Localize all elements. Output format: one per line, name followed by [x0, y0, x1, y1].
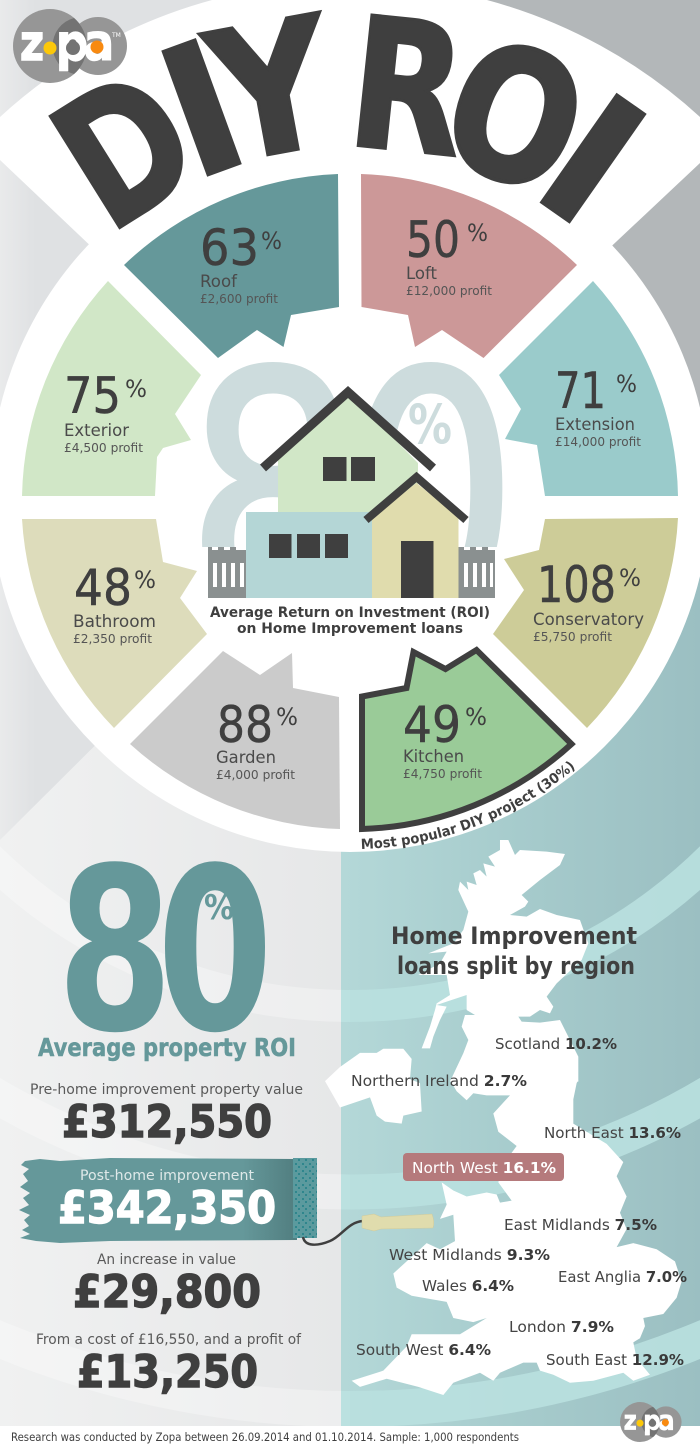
segment: extension: % — [616, 370, 637, 398]
central faded 80%: % — [408, 393, 452, 456]
segment: exterior — [22, 281, 201, 496]
logo: zopa bottom: a — [658, 1406, 675, 1437]
region labels: West Midlands 9.3% — [389, 1246, 550, 1264]
segment: loft: Loft — [406, 264, 437, 284]
segment: exterior: Exterior — [64, 421, 129, 441]
roller handle — [362, 1214, 434, 1231]
segment: kitchen, highlighted: Kitchen — [403, 747, 464, 767]
central faded 80% — [202, 362, 502, 547]
caption: average ROI: Average Return on Investment (ROI) — [210, 605, 490, 621]
segment: garden: % — [276, 703, 298, 731]
logo: zopa bottom: p — [643, 1406, 661, 1437]
upper windows — [323, 457, 375, 481]
fence: right — [458, 547, 495, 598]
big 80%: % — [204, 888, 234, 928]
heading: loans by region: Home Improvement — [391, 922, 637, 950]
big 80%: 8 — [57, 820, 173, 1083]
segment: exterior: % — [125, 375, 147, 403]
stat: pre-improvement value: Pre-home improvement property value — [30, 1082, 303, 1098]
region labels: London 7.9% — [509, 1318, 614, 1336]
region labels: South West 6.4% — [356, 1341, 491, 1359]
logo: zopa top: a — [84, 14, 114, 72]
segment: loft: % — [467, 219, 488, 247]
logo: zopa bottom: z — [624, 1406, 637, 1437]
roller cable — [303, 1221, 363, 1245]
roller head — [293, 1158, 317, 1238]
segment: garden: 88 — [217, 696, 273, 754]
logo: zopa top — [13, 9, 127, 83]
central faded 80%: 8 — [186, 304, 360, 684]
region labels: East Anglia 7.0% — [558, 1268, 687, 1286]
segment: bathroom: % — [134, 566, 156, 594]
white title fan and wheel backing — [0, 0, 700, 852]
region labels: Scotland 10.2% — [495, 1035, 617, 1053]
subhead: average property ROI: Average property ROI — [38, 1033, 296, 1062]
title: DIY ROI: I — [503, 57, 678, 266]
heading: loans by region — [391, 922, 637, 980]
footer note: Research was conducted by Zopa between 26.09.2014 and 01.10.2014. Sample: 1,000 respondents — [11, 1430, 519, 1444]
segment: conservatory — [493, 518, 678, 728]
segment: extension — [499, 281, 678, 496]
callout: north west: North West 16.1% — [412, 1159, 556, 1177]
segment: roof: % — [261, 227, 282, 255]
logo: zopa top: p — [56, 14, 88, 72]
segment: loft: 50 — [406, 211, 460, 269]
title: DIY ROI: O — [418, 0, 610, 239]
door — [401, 541, 434, 598]
segment: garden: £4,000 profit — [216, 767, 295, 782]
stat: post-improvement value: £342,350 — [58, 1183, 276, 1234]
central faded 80%: 0 — [344, 304, 518, 684]
segment: bathroom — [22, 519, 207, 728]
segment: kitchen, highlighted — [362, 650, 572, 829]
stat: increase in value: An increase in value — [97, 1252, 236, 1268]
segment: loft: £12,000 profit — [406, 283, 492, 298]
UK map — [325, 840, 682, 1395]
segment: garden — [130, 651, 340, 829]
stat: post-improvement value: Post-home improvement — [80, 1168, 254, 1184]
segment: exterior: 75 — [64, 367, 121, 425]
logo: zopa top: z — [20, 14, 44, 72]
segment: conservatory: Conservatory — [533, 610, 644, 630]
heading: loans by region: loans split by region — [397, 952, 635, 980]
segment: roof: 63 — [200, 219, 259, 277]
title: DIY ROI: I — [136, 2, 270, 221]
region labels: North East 13.6% — [544, 1124, 681, 1142]
fence: left — [208, 547, 246, 598]
roof: main — [263, 392, 433, 468]
house illustration — [208, 392, 495, 598]
wing windows — [269, 534, 348, 558]
caption: average ROI: on Home Improvement loans — [237, 621, 463, 637]
segment: bathroom: £2,350 profit — [73, 631, 152, 646]
region labels: Northern Ireland 2.7% — [351, 1072, 527, 1090]
region labels: South East 12.9% — [546, 1351, 684, 1369]
segment: extension: Extension — [555, 415, 635, 435]
segment: conservatory: 108 — [537, 556, 616, 614]
logo: zopa bottom — [620, 1402, 682, 1442]
big 80%: 0 — [157, 820, 273, 1083]
segment: kitchen, highlighted: % — [465, 703, 487, 731]
upper storey — [278, 392, 418, 515]
paint roller stroke — [19, 1158, 434, 1245]
caption: average ROI — [210, 605, 490, 637]
segment: exterior: £4,500 profit — [64, 440, 143, 455]
stat: cost and profit — [36, 1332, 302, 1398]
segment: roof: Roof — [200, 272, 238, 292]
stat: cost and profit: From a cost of £16,550, and a profit of — [36, 1332, 302, 1348]
stat: cost and profit: £13,250 — [77, 1347, 258, 1398]
porch — [372, 483, 458, 598]
segment: conservatory: £5,750 profit — [533, 629, 612, 644]
stat: increase in value: £29,800 — [73, 1267, 261, 1318]
curved note: most popular project: Most popular DIY project (30%) — [362, 761, 575, 849]
region labels: Wales 6.4% — [422, 1277, 514, 1295]
segment: conservatory: % — [619, 564, 641, 592]
roof: porch — [366, 477, 466, 520]
segment: bathroom: Bathroom — [73, 612, 156, 632]
stat: pre-improvement value — [30, 1082, 303, 1148]
segment: extension: £14,000 profit — [555, 434, 641, 449]
region labels: East Midlands 7.5% — [504, 1216, 657, 1234]
callout: north west — [403, 1153, 564, 1181]
segment: loft — [361, 174, 577, 358]
segment: kitchen, highlighted: 49 — [403, 696, 461, 754]
segment: roof: £2,600 profit — [200, 291, 278, 306]
logo: zopa top: TM — [111, 32, 121, 39]
segment: bathroom: 48 — [74, 559, 132, 617]
extension wing — [246, 512, 372, 598]
segment: roof — [124, 174, 339, 358]
stat: pre-improvement value: £312,550 — [62, 1097, 272, 1148]
segment: kitchen, highlighted: £4,750 profit — [403, 766, 482, 781]
title: DIY ROI — [21, 0, 678, 271]
segment: garden: Garden — [216, 748, 276, 768]
segment: extension: 71 — [555, 362, 606, 420]
region labels — [351, 1035, 687, 1369]
title: DIY ROI: D — [21, 31, 233, 271]
